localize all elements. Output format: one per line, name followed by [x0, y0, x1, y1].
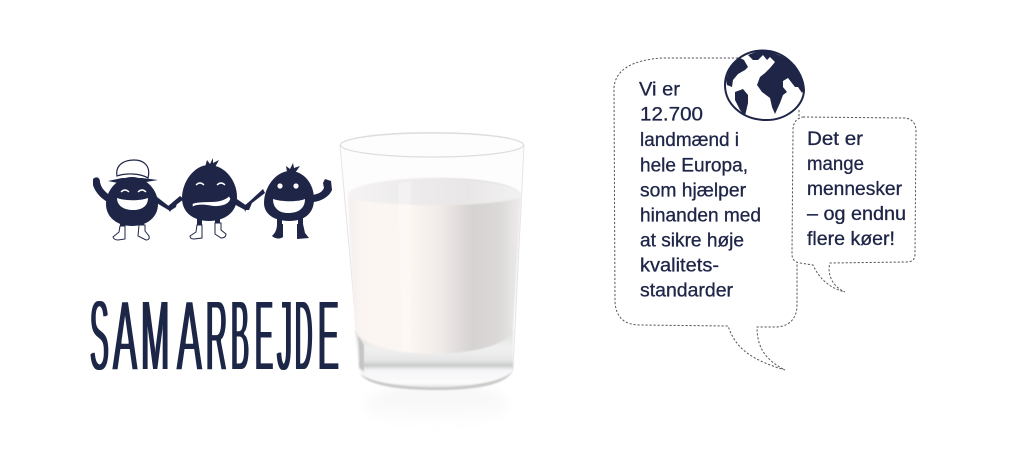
rim — [340, 133, 524, 157]
title — [90, 279, 339, 392]
speech text: small bubble: flere køer! — [807, 229, 895, 250]
speech text: large bubble: Vi er — [639, 80, 681, 100]
title: E — [255, 280, 273, 392]
speech text: large bubble: kvalitets- — [640, 256, 719, 277]
title: R — [206, 279, 227, 392]
speech text: large bubble: 12.700 — [640, 105, 703, 126]
title: M — [141, 279, 169, 391]
icon: three holding-hands characters — [93, 158, 332, 240]
speech text: large bubble: hinanden med — [640, 206, 761, 227]
milk surface — [349, 178, 520, 205]
milk — [348, 178, 521, 354]
title: D — [295, 281, 312, 392]
speech bubble: small — [792, 117, 916, 292]
title: A — [113, 280, 137, 391]
speech text: large bubble: som hjælper — [640, 180, 747, 202]
speech text: small bubble: mange — [807, 154, 864, 175]
speech text: large bubble — [639, 80, 761, 302]
speech text: small bubble: Det er — [807, 129, 864, 150]
title: B — [231, 280, 249, 392]
glass reflection — [365, 384, 509, 428]
title: E — [318, 279, 339, 392]
speech bubble: large — [614, 58, 799, 370]
character: flexing arm — [244, 163, 332, 239]
speech text: small bubble: – og endnu — [807, 204, 906, 225]
glass body — [340, 132, 524, 389]
title: J — [277, 279, 292, 392]
title: S — [90, 280, 109, 392]
speech text: large bubble: landmænd i — [640, 130, 739, 151]
title: A — [177, 280, 202, 391]
speech text: large bubble: standarder — [640, 281, 734, 302]
speech text: small bubble — [807, 129, 906, 250]
glass base — [355, 330, 513, 389]
highlight — [398, 182, 411, 350]
character: wavy mouth — [167, 158, 252, 239]
speech text: small bubble: mennesker — [807, 179, 903, 200]
speech text: large bubble: at sikre høje — [640, 231, 744, 252]
icon: globe — [725, 50, 804, 120]
character: with cap — [93, 160, 177, 240]
speech text: large bubble: hele Europa, — [640, 155, 748, 176]
glass of milk — [340, 132, 524, 428]
